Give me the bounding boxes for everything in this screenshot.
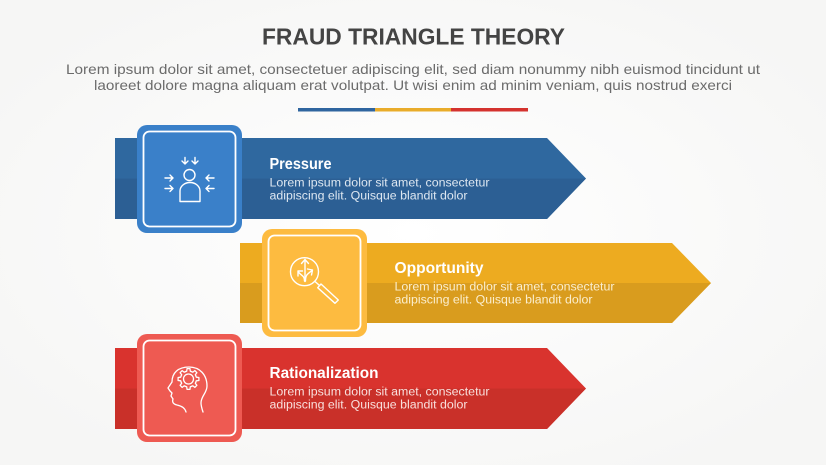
text: pressure: adipiscing elit. Quisque blandit dolor (270, 190, 468, 202)
intro text: laoreet dolore magna aliquam erat volutpat. Ut wisi enim ad minim veniam, quis nostrud exerci (94, 77, 732, 93)
panel: pressure (115, 125, 586, 233)
text: rationalization: adipiscing elit. Quisque blandit dolor (270, 400, 468, 412)
intro text: Lorem ipsum dolor sit amet, consectetuer adipiscing elit, sed diam nonummy nibh euismod tincidunt ut (66, 61, 760, 77)
icon box: rationalization (137, 334, 242, 442)
arrow: rationalization (115, 348, 586, 429)
icon: person under pressure (165, 158, 214, 202)
tricolor divider (298, 108, 528, 112)
panel: rationalization (115, 334, 586, 442)
text: opportunity: adipiscing elit. Quisque blandit dolor (394, 294, 593, 306)
heading: pressure: Pressure (270, 156, 332, 173)
text: pressure (270, 178, 490, 202)
icon box: opportunity (262, 229, 367, 337)
text: rationalization (270, 386, 490, 412)
text: rationalization: Lorem ipsum dolor sit amet, consectetur (270, 386, 490, 398)
title: FRAUD TRIANGLE THEORY (262, 24, 565, 50)
heading: rationalization: Rationalization (270, 365, 378, 382)
arrow: opportunity (240, 243, 711, 323)
icon: magnifier with arrows (290, 258, 338, 303)
icon box: pressure (137, 125, 242, 233)
text: opportunity (394, 282, 615, 306)
icon: head with gear (168, 367, 207, 412)
heading: opportunity: Opportunity (394, 260, 484, 277)
intro text (66, 61, 760, 93)
panel: opportunity (240, 229, 711, 337)
text: opportunity: Lorem ipsum dolor sit amet, consectetur (394, 282, 615, 294)
arrow: pressure (115, 138, 586, 219)
text: pressure: Lorem ipsum dolor sit amet, consectetur (270, 178, 490, 190)
